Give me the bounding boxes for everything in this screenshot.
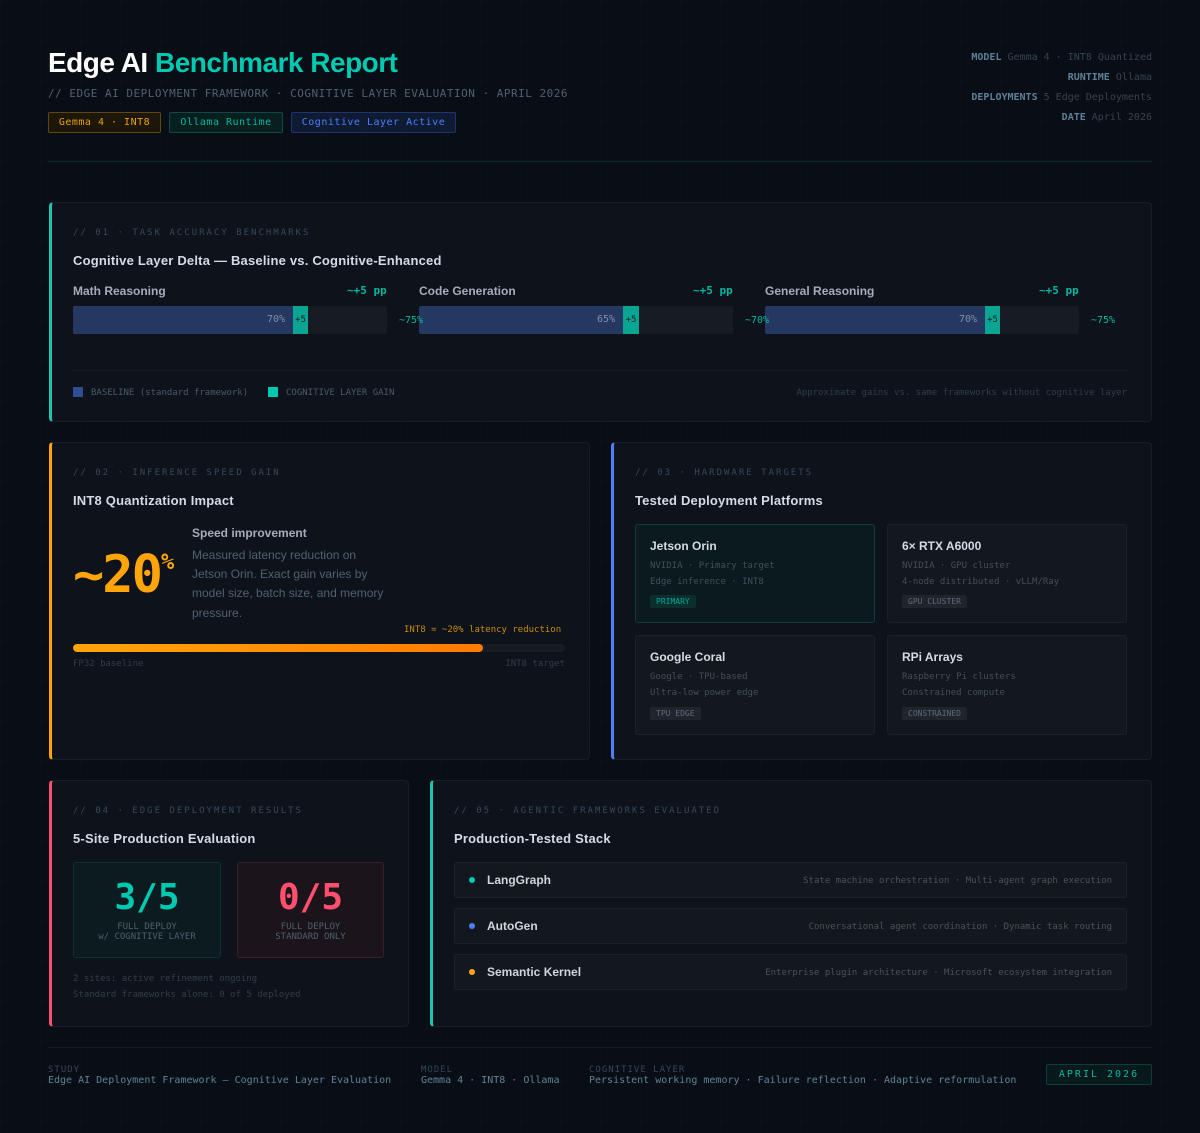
card: RTX A6000: GPU CLUSTER	[908, 597, 961, 606]
badge: model	[48, 112, 161, 133]
card: Jetson Orin: Edge inference · INT8	[650, 577, 764, 587]
text: Math Reasoning	[73, 284, 166, 298]
card: RPi Arrays: RPi Arrays	[902, 650, 963, 664]
text: ~75%	[399, 315, 423, 326]
text: %	[161, 550, 174, 575]
card: Jetson Orin: Jetson Orin	[650, 539, 717, 553]
subtitle: // EDGE AI DEPLOYMENT FRAMEWORK · COGNITIVE LAYER EVALUATION · APRIL 2026	[48, 87, 568, 100]
stat: cognitive layer deployments: w/ COGNITIVE LAYER	[98, 932, 196, 942]
metadata block: DATE April 2026	[1062, 112, 1152, 123]
section heading 04: 5-Site Production Evaluation	[73, 831, 256, 846]
bar: code generation	[419, 284, 769, 334]
text: 70%	[267, 314, 285, 325]
text: ~+5 pp	[347, 284, 387, 297]
card: RTX A6000: 4-node distributed · vLLM/Ray	[902, 577, 1059, 587]
footnote: Approximate gains vs. same frameworks without cognitive layer	[796, 388, 1127, 398]
text: ~70%	[745, 315, 769, 326]
section label 05: // 05 · AGENTIC FRAMEWORKS EVALUATED	[454, 806, 721, 816]
metadata block: MODEL Gemma 4 · INT8 Quantized	[971, 52, 1152, 63]
section heading 03: Tested Deployment Platforms	[635, 493, 823, 508]
text: BASELINE (standard framework)	[91, 388, 248, 398]
row: Semantic Kernel: Enterprise plugin architecture · Microsoft ecosystem integration	[765, 968, 1112, 978]
speed description: Jetson Orin. Exact gain varies by	[192, 567, 367, 581]
badge: runtime	[169, 112, 283, 133]
progress labels	[73, 659, 565, 669]
stat: standard deployments: 0/5	[278, 877, 343, 918]
row: AutoGen: AutoGen	[487, 919, 538, 933]
card: RPi Arrays	[887, 635, 1127, 735]
deployment notes	[73, 974, 301, 1000]
footer: Gemma 4 · INT8 · Ollama	[421, 1075, 559, 1086]
text: ~+5 pp	[1039, 284, 1079, 297]
progress labels: FP32 baseline	[73, 659, 143, 669]
card: RTX A6000: NVIDIA · GPU cluster	[902, 561, 1010, 571]
panel: hardware targets	[611, 442, 1152, 760]
row: AutoGen	[454, 908, 1127, 944]
deployment notes: 2 sites: active refinement ongoing	[73, 974, 257, 984]
text: 70%	[959, 314, 977, 325]
row: LangGraph	[454, 862, 1127, 898]
row: LangGraph: State machine orchestration · Multi-agent graph execution	[803, 876, 1112, 886]
row: Semantic Kernel	[454, 954, 1127, 990]
panel: task accuracy benchmarks	[49, 202, 1152, 422]
badge: runtime: Ollama Runtime	[180, 117, 272, 128]
card: RPi Arrays: Constrained compute	[902, 688, 1005, 698]
text: ~+5 pp	[693, 284, 733, 297]
metadata block: DEPLOYMENTS 5 Edge Deployments	[971, 92, 1152, 103]
speed description	[192, 526, 384, 620]
card: RPi Arrays: Raspberry Pi clusters	[902, 672, 1016, 682]
progress labels: INT8 target	[505, 659, 565, 669]
text: General Reasoning	[765, 284, 874, 298]
footer: MODEL	[421, 1065, 453, 1075]
card: Google Coral: Ultra-low power edge	[650, 688, 758, 698]
bar: general reasoning	[765, 284, 1115, 334]
card: RTX A6000: 6× RTX A6000	[902, 539, 981, 553]
stat: standard deployments: FULL DEPLOY	[281, 922, 340, 932]
footer: COGNITIVE LAYER	[589, 1065, 685, 1075]
card: RPi Arrays: CONSTRAINED	[908, 709, 961, 718]
text: ~75%	[1091, 315, 1115, 326]
section heading 01: Cognitive Layer Delta — Baseline vs. Cognitive-Enhanced	[73, 253, 442, 268]
metadata block	[971, 52, 1152, 123]
big number: ~20	[73, 545, 161, 605]
card: Jetson Orin	[635, 524, 875, 623]
header	[48, 47, 1152, 133]
stat: cognitive layer deployments	[73, 862, 221, 958]
section heading 05: Production-Tested Stack	[454, 831, 611, 846]
speed description: pressure.	[192, 606, 242, 620]
panel: inference speed gain	[49, 442, 590, 760]
section heading 02: INT8 Quantization Impact	[73, 493, 234, 508]
card: Google Coral	[635, 635, 875, 735]
footer	[48, 1064, 1152, 1086]
stat: cognitive layer deployments: 3/5	[114, 877, 180, 918]
row: AutoGen: Conversational agent coordination · Dynamic task routing	[809, 922, 1112, 932]
footer: APRIL 2026	[1059, 1069, 1139, 1080]
speed description: model size, batch size, and memory	[192, 586, 383, 600]
text: +5	[626, 315, 636, 325]
bar: math reasoning	[73, 284, 423, 334]
badge: model: Gemma 4 · INT8	[59, 117, 150, 128]
text: 65%	[597, 314, 615, 325]
stat: cognitive layer deployments: FULL DEPLOY	[117, 922, 177, 932]
progress annotation: INT8 = ~20% latency reduction	[404, 625, 561, 635]
deployment notes: Standard frameworks alone: 0 of 5 deployed	[73, 990, 301, 1000]
footer: Persistent working memory · Failure reflection · Adaptive reformulation	[589, 1075, 1016, 1086]
text: +5	[987, 315, 998, 325]
card: Jetson Orin: PRIMARY	[656, 597, 690, 606]
card: Google Coral: Google · TPU-based	[650, 672, 748, 682]
footer: Edge AI Deployment Framework — Cognitive Layer Evaluation	[48, 1075, 391, 1086]
card: Jetson Orin: NVIDIA · Primary target	[650, 561, 775, 571]
stat: standard deployments	[237, 862, 384, 958]
speed description: Measured latency reduction on	[192, 548, 356, 562]
section label 01: // 01 · TASK ACCURACY BENCHMARKS	[73, 228, 310, 238]
stat: standard deployments: STANDARD ONLY	[275, 932, 346, 942]
section label 04: // 04 · EDGE DEPLOYMENT RESULTS	[73, 806, 303, 816]
card: RTX A6000	[887, 524, 1127, 623]
badge: cognitive layer	[291, 112, 456, 133]
text: Code Generation	[419, 284, 516, 298]
card: Google Coral: Google Coral	[650, 650, 725, 664]
card: Google Coral: TPU EDGE	[656, 709, 695, 718]
speed description: Speed improvement	[192, 526, 307, 540]
section label 03: // 03 · HARDWARE TARGETS	[635, 468, 813, 478]
panel: edge deployment results	[49, 780, 409, 1027]
legend	[73, 387, 394, 398]
row: LangGraph: LangGraph	[487, 873, 551, 887]
metadata block: RUNTIME Ollama	[1068, 72, 1152, 83]
badge: cognitive layer: Cognitive Layer Active	[302, 117, 445, 128]
title: Edge AI Benchmark Report	[48, 47, 398, 78]
section label 02: // 02 · INFERENCE SPEED GAIN	[73, 468, 281, 478]
panel: agentic frameworks	[430, 780, 1152, 1027]
progress bar	[73, 644, 565, 652]
text: +5	[295, 315, 306, 325]
text: COGNITIVE LAYER GAIN	[286, 388, 394, 398]
row: Semantic Kernel: Semantic Kernel	[487, 965, 581, 979]
footer: STUDY	[48, 1065, 80, 1075]
